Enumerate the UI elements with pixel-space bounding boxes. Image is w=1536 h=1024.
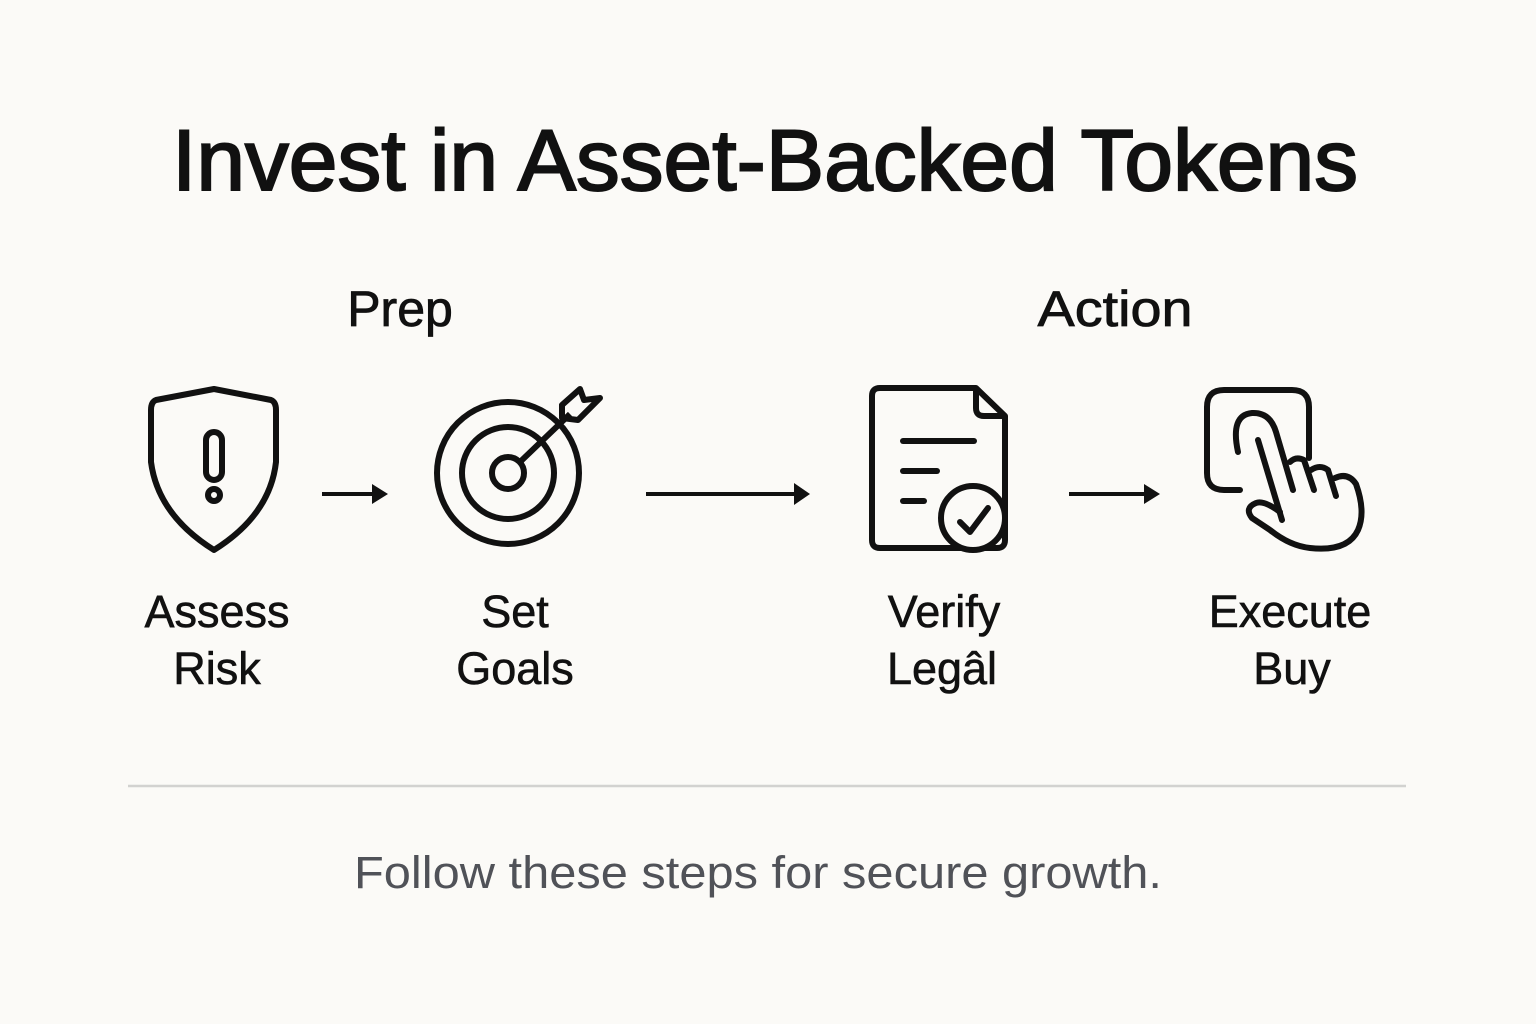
label: Assess Risk: Risk — [173, 643, 261, 694]
icon: target — [437, 389, 600, 544]
label: Execute Buy: Execute — [1209, 586, 1371, 637]
label: Execute Buy: Buy — [1253, 643, 1331, 694]
arrow 3 — [1069, 484, 1160, 504]
label: Assess Risk: Assess — [144, 586, 290, 637]
label: Verify Legal: Legâl — [887, 643, 997, 694]
arrow 1 — [322, 484, 388, 504]
label: Set Goals: Goals — [456, 643, 574, 694]
heading: Action: Action — [1038, 281, 1192, 337]
icon: hand tapping button — [1207, 390, 1362, 549]
title: Invest in Asset-Backed Tokens — [172, 113, 1358, 209]
icon: shield — [151, 389, 276, 550]
footer text: Follow these steps for secure growth. — [354, 847, 1162, 898]
arrow 2 — [646, 483, 810, 505]
label: Verify Legal: Verify — [888, 586, 1001, 637]
icon: document with check — [872, 388, 1005, 550]
heading: Prep: Prep — [347, 281, 453, 337]
label: Set Goals: Set — [481, 586, 549, 637]
